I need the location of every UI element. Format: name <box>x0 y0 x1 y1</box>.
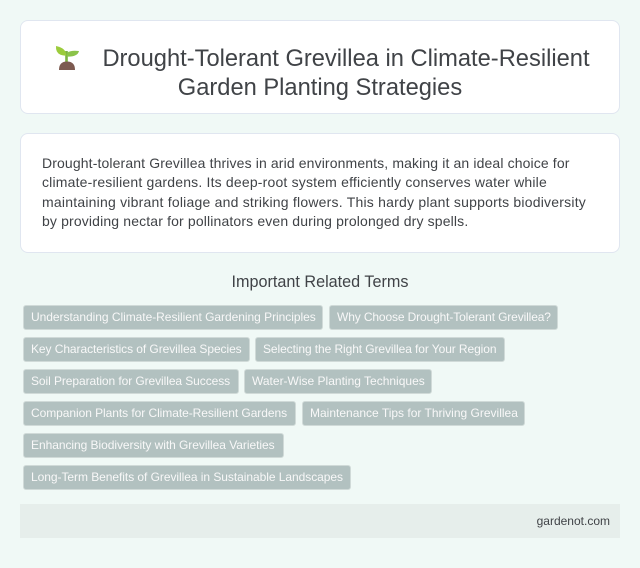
tag <box>23 337 250 362</box>
tag <box>23 465 351 490</box>
description line one: Drought-tolerant Grevillea thrives in arid environments, making it an ideal choice for <box>42 155 570 171</box>
footer bar <box>20 504 620 538</box>
tag <box>23 401 296 426</box>
tag <box>23 305 323 330</box>
tag: Why Choose Drought-Tolerant Grevillea? <box>337 310 551 324</box>
icon: seedling <box>56 46 79 70</box>
tag: Water-Wise Planting Techniques <box>252 374 425 388</box>
section heading: Important Related Terms <box>232 273 408 291</box>
tag: Maintenance Tips for Thriving Grevillea <box>310 406 518 420</box>
tag <box>23 369 239 394</box>
tag: Long-Term Benefits of Grevillea in Sustainable Landscapes <box>31 470 343 484</box>
tag: Enhancing Biodiversity with Grevillea Varieties <box>31 438 275 452</box>
tag: Key Characteristics of Grevillea Species <box>31 342 242 356</box>
panel: title card <box>20 20 620 114</box>
footer text: gardenot.com <box>537 514 610 528</box>
description line two: climate-resilient gardens. Its deep-root system efficiently conserves water while <box>42 174 547 190</box>
tag <box>302 401 525 426</box>
tag <box>255 337 505 362</box>
tag: Understanding Climate-Resilient Gardening Principles <box>31 310 316 324</box>
tag <box>244 369 432 394</box>
description line three: maintaining vibrant foliage and striking flowers. This hardy plant supports biodiversity <box>42 194 586 210</box>
description line four: by providing nectar for pollinators even during prolonged dry spells. <box>42 213 468 229</box>
tag <box>329 305 558 330</box>
tag: Companion Plants for Climate-Resilient Gardens <box>31 406 287 420</box>
tag <box>23 433 284 458</box>
tag: Soil Preparation for Grevillea Success <box>31 374 230 388</box>
panel: description card <box>20 133 620 253</box>
title: line two: Garden Planting Strategies <box>178 75 462 101</box>
title: line one: Drought-Tolerant Grevillea in Climate-Resilient <box>102 46 590 72</box>
tag: Selecting the Right Grevillea for Your Region <box>263 342 496 356</box>
